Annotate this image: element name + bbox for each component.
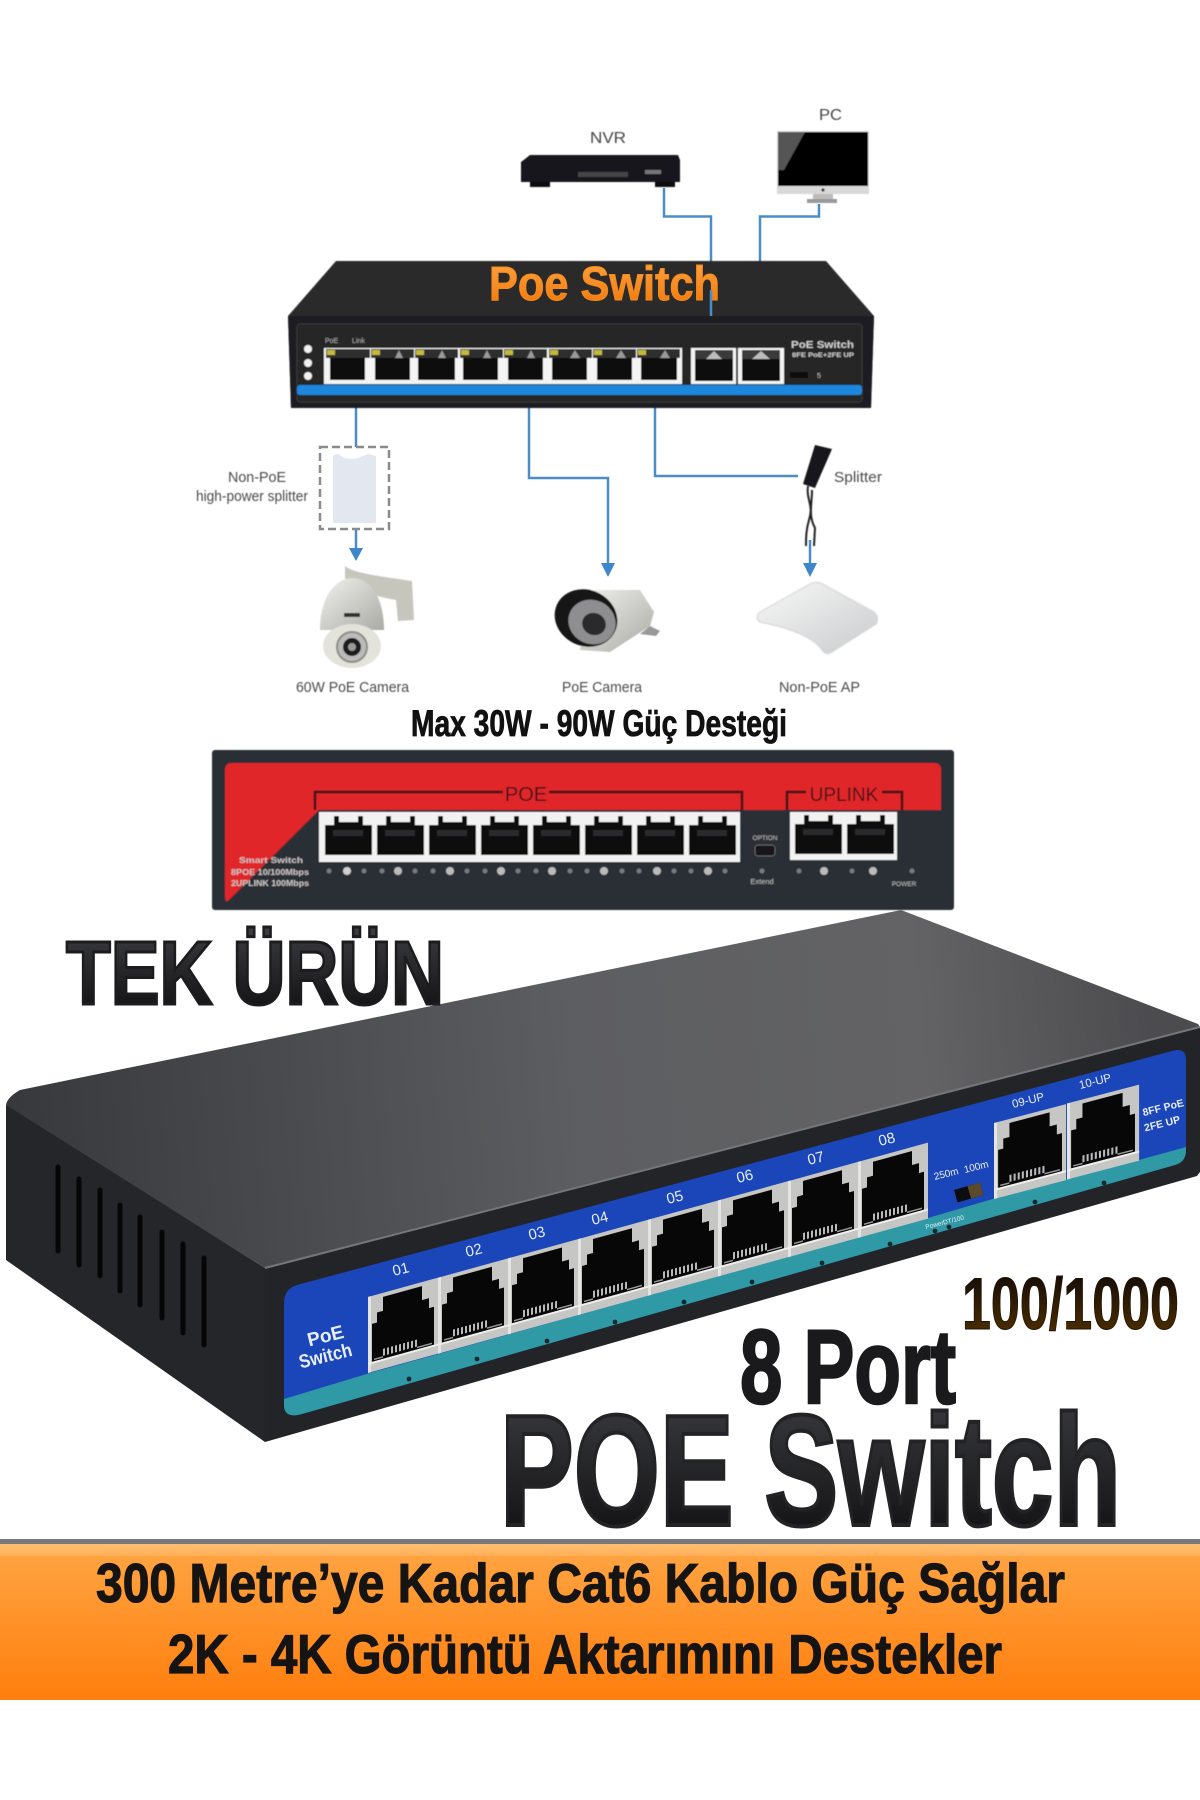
network diagram	[196, 107, 882, 696]
panel brand: Switch	[297, 1340, 354, 1373]
port numbers: 02	[464, 1240, 484, 1261]
feature line 2: 2K - 4K Görüntü Aktarımını Destekler	[168, 1623, 1002, 1685]
PoE and Link labels: Link	[352, 338, 365, 345]
main switch device	[6, 910, 1200, 1442]
top face	[6, 910, 1200, 1268]
icon: NVR recorder	[521, 155, 680, 187]
heading: 8 Port: 8 Port	[740, 1309, 956, 1426]
model text: 8POE 10/100Mbps	[231, 868, 310, 877]
dashed splitter box	[320, 447, 389, 529]
uplink port block	[994, 1085, 1139, 1199]
splitter labels	[196, 470, 308, 505]
option switch: POWER	[892, 881, 917, 888]
port numbers: 04	[590, 1208, 610, 1229]
top switch device	[288, 261, 874, 408]
option switch	[750, 835, 917, 888]
port numbers: Power	[925, 1220, 945, 1231]
arrowheads	[349, 548, 817, 577]
UPLINK bracket	[787, 785, 902, 810]
status dots	[407, 1181, 1106, 1381]
red switch panel	[212, 750, 954, 910]
eight port block	[324, 348, 682, 384]
blue strip	[297, 385, 862, 395]
device labels	[791, 339, 855, 359]
left side face	[6, 1105, 265, 1442]
icon: splitter	[803, 445, 832, 546]
front face	[265, 1027, 1200, 1442]
POE bracket: POE	[505, 784, 547, 806]
mode switch: 5	[817, 373, 821, 380]
port numbers: 03	[527, 1223, 547, 1244]
uplink ports	[691, 348, 784, 384]
icon: bullet camera	[545, 579, 660, 657]
PoE and Link labels: PoE	[325, 338, 339, 345]
model text: Smart Switch	[239, 856, 303, 865]
splitter labels: Non-PoE	[228, 470, 286, 486]
port numbers: DT/100	[942, 1214, 965, 1227]
PC label: PC	[819, 107, 842, 124]
port numbers: 100m	[963, 1159, 990, 1176]
icon: dome camera	[320, 566, 414, 668]
device labels: 8FE PoE+2FE UP	[792, 352, 855, 359]
port numbers: 08	[877, 1129, 897, 1150]
port numbers: 8FF PoE	[1141, 1097, 1185, 1119]
UPLINK bracket: UPLINK	[810, 785, 879, 806]
port numbers: 05	[665, 1187, 685, 1208]
splitter labels: high-power splitter	[196, 489, 308, 505]
device labels: PoE Switch	[791, 339, 854, 351]
icon: access point	[757, 582, 878, 654]
feature line 1: 300 Metre’ye Kadar Cat6 Kablo Güç Sağlar	[96, 1552, 1065, 1614]
connection lines	[356, 188, 819, 568]
port numbers: 01	[391, 1259, 411, 1280]
POE bracket	[315, 784, 742, 810]
NVR label: NVR	[590, 130, 626, 147]
panel brand	[297, 1322, 354, 1373]
PoE and Link labels	[325, 338, 365, 345]
model text	[231, 856, 310, 888]
heading: Poe Switch: Poe Switch	[489, 258, 720, 311]
LEDs	[304, 345, 312, 380]
panel brand: PoE	[305, 1322, 346, 1351]
teal strip	[284, 1147, 1186, 1415]
Non-PoE AP label: Non-PoE AP	[779, 680, 860, 696]
distance switch	[954, 1183, 984, 1202]
line over heading	[710, 290, 712, 316]
port numbers: 2FE UP	[1143, 1114, 1182, 1134]
model text: 2UPLINK 100Mbps	[231, 879, 310, 888]
heading: TEK URUN: TEK ÜRÜN	[66, 924, 444, 1024]
port numbers: 250m	[933, 1166, 960, 1183]
Splitter label: Splitter	[834, 469, 882, 486]
heading: max power: Max 30W - 90W Güç Desteği	[411, 703, 787, 744]
blue front panel	[284, 1050, 1186, 1415]
port numbers: 07	[806, 1148, 826, 1169]
icon: PC monitor	[777, 131, 869, 203]
banner rule	[0, 1539, 1200, 1544]
option switch: Extend	[750, 877, 774, 886]
60W PoE Camera label: 60W PoE Camera	[296, 680, 410, 696]
port numbers	[391, 1072, 1185, 1280]
port numbers: 06	[735, 1166, 755, 1187]
option switch: OPTION	[753, 835, 778, 842]
port numbers: 10-UP	[1078, 1072, 1113, 1092]
PoE Camera label: PoE Camera	[562, 680, 643, 696]
side vents	[58, 1167, 204, 1345]
POE ports	[319, 812, 740, 862]
LED row	[326, 867, 914, 875]
mode switch	[790, 372, 821, 380]
eight port block	[368, 1143, 928, 1373]
uplink ports	[790, 812, 897, 860]
orange feature banner	[0, 1544, 1200, 1700]
port numbers: 09-UP	[1011, 1091, 1046, 1111]
